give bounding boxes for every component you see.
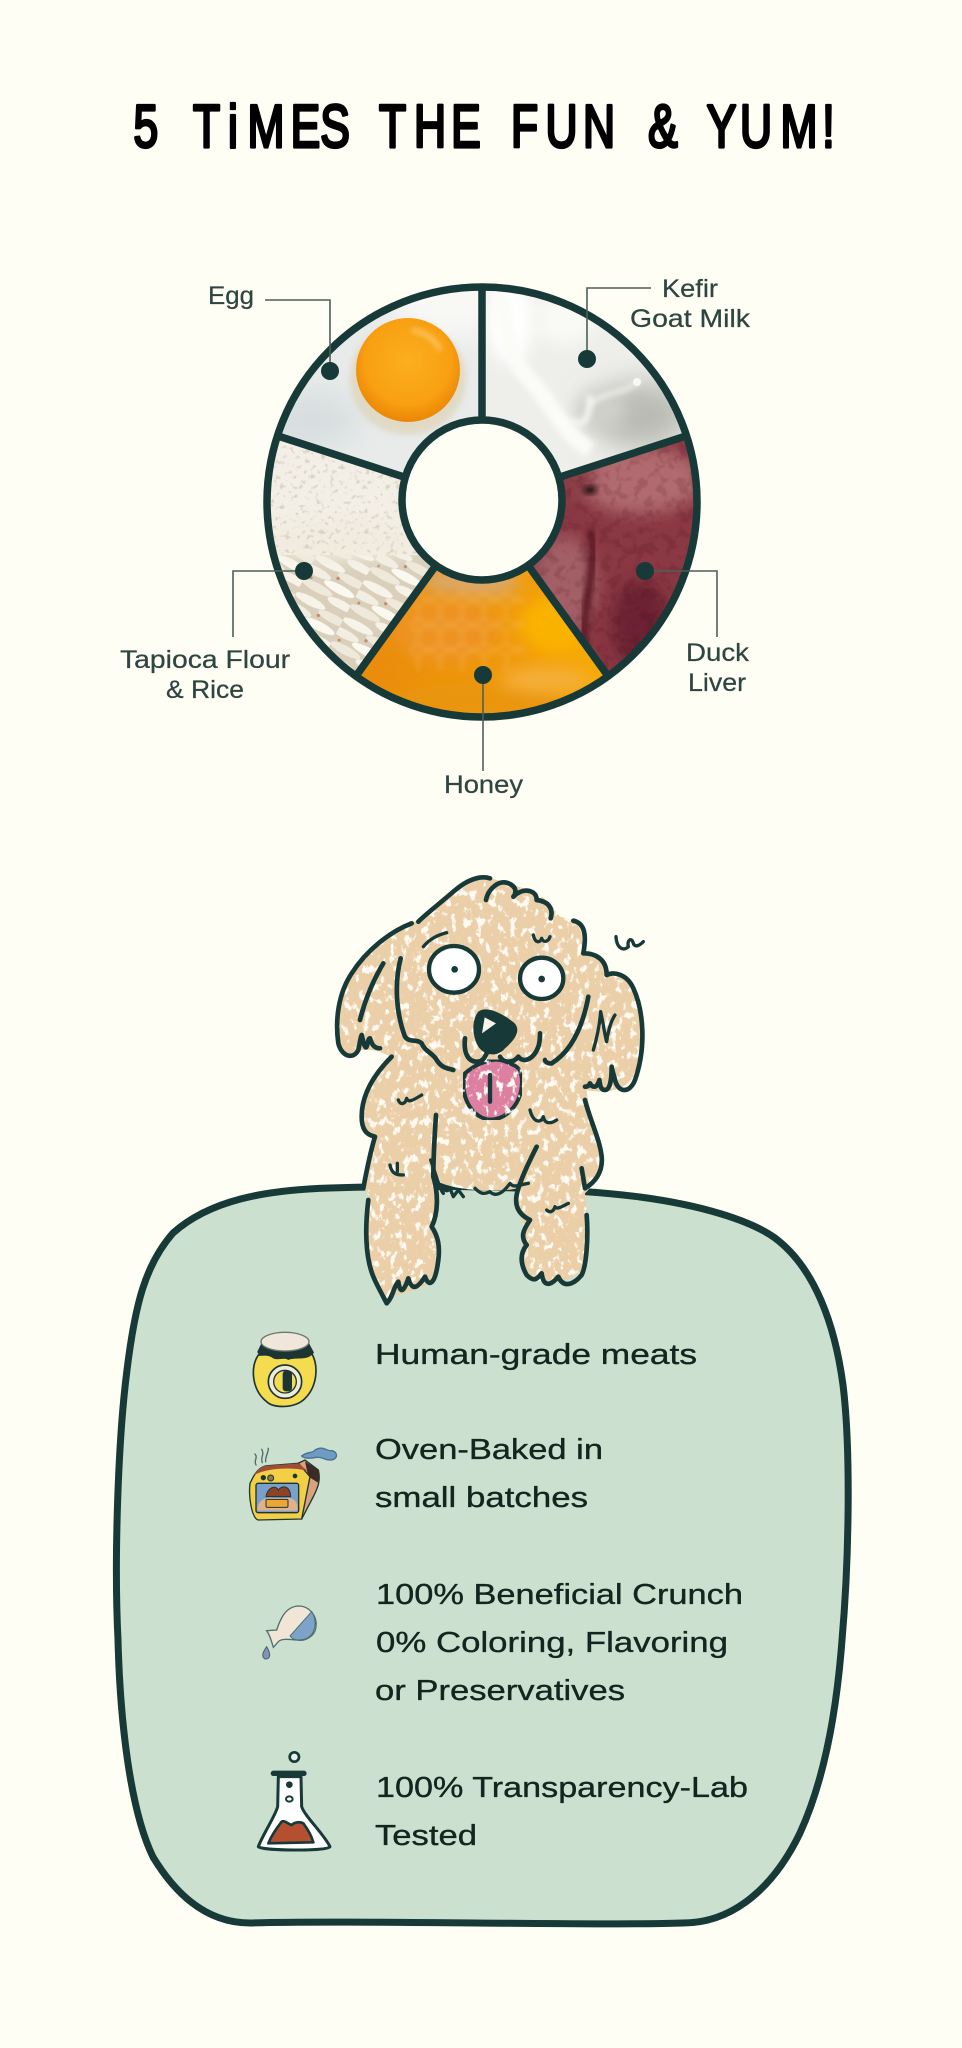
dog eyes [429, 946, 563, 999]
dog nose [473, 1009, 517, 1054]
text: 0% Coloring, Flavoring [376, 1627, 728, 1659]
dog tongue [463, 1060, 522, 1120]
text: Human-grade meats [375, 1339, 697, 1371]
text [375, 1579, 743, 1707]
callout: tapioca flour and rice [120, 562, 313, 704]
icon: oven [250, 1448, 336, 1520]
wheel segment: egg [282, 302, 478, 472]
text: small batches [375, 1482, 588, 1514]
wheel outline and dividers [267, 287, 697, 717]
callout: duck liver [636, 562, 750, 697]
callout: egg [208, 282, 339, 380]
benefit: human-grade meats [253, 1332, 697, 1406]
callout: kefir goat milk: Goat Milk [630, 305, 751, 333]
dog illustration [337, 877, 643, 1303]
panel: benefits [116, 1186, 848, 1924]
title: 5 TiMES THE FUN & YUM! [134, 94, 835, 161]
ingredient wheel [120, 260, 751, 799]
text [375, 1434, 603, 1514]
wheel segment: honey [361, 570, 603, 714]
dog line work [337, 877, 643, 1303]
text: Tested [375, 1820, 477, 1852]
callout: duck liver: Duck [686, 639, 750, 667]
wheel segment: tapioca flour and rice [270, 440, 430, 671]
callout: tapioca flour and rice: & Rice [166, 676, 244, 704]
dog mouth [465, 1033, 540, 1062]
wheel centre hole [402, 420, 562, 580]
benefit: beneficial crunch [263, 1579, 743, 1707]
callout: kefir goat milk: Kefir [662, 275, 718, 303]
icon: honey jar [253, 1332, 316, 1406]
benefit: transparency [258, 1752, 748, 1852]
text [375, 1772, 748, 1852]
callout: egg: Egg [208, 282, 254, 310]
wheel segment: kefir goat milk [486, 291, 682, 472]
callout: duck liver: Liver [688, 669, 746, 697]
icon: lab flask [258, 1752, 330, 1850]
callout: tapioca flour and rice: Tapioca Flour [120, 646, 290, 674]
text: Oven-Baked in [375, 1434, 603, 1466]
text: or Preservatives [375, 1675, 625, 1707]
callout: kefir goat milk [578, 275, 751, 368]
dog fur [337, 877, 642, 1300]
icon: pouring flask [263, 1606, 316, 1659]
text: 100% Beneficial Crunch [376, 1579, 743, 1611]
benefit: oven-baked [250, 1434, 603, 1520]
wheel segment: duck liver [533, 440, 694, 671]
callout: honey [444, 666, 524, 799]
text: 100% Transparency-Lab [376, 1772, 748, 1804]
callout: honey: Honey [444, 771, 524, 799]
